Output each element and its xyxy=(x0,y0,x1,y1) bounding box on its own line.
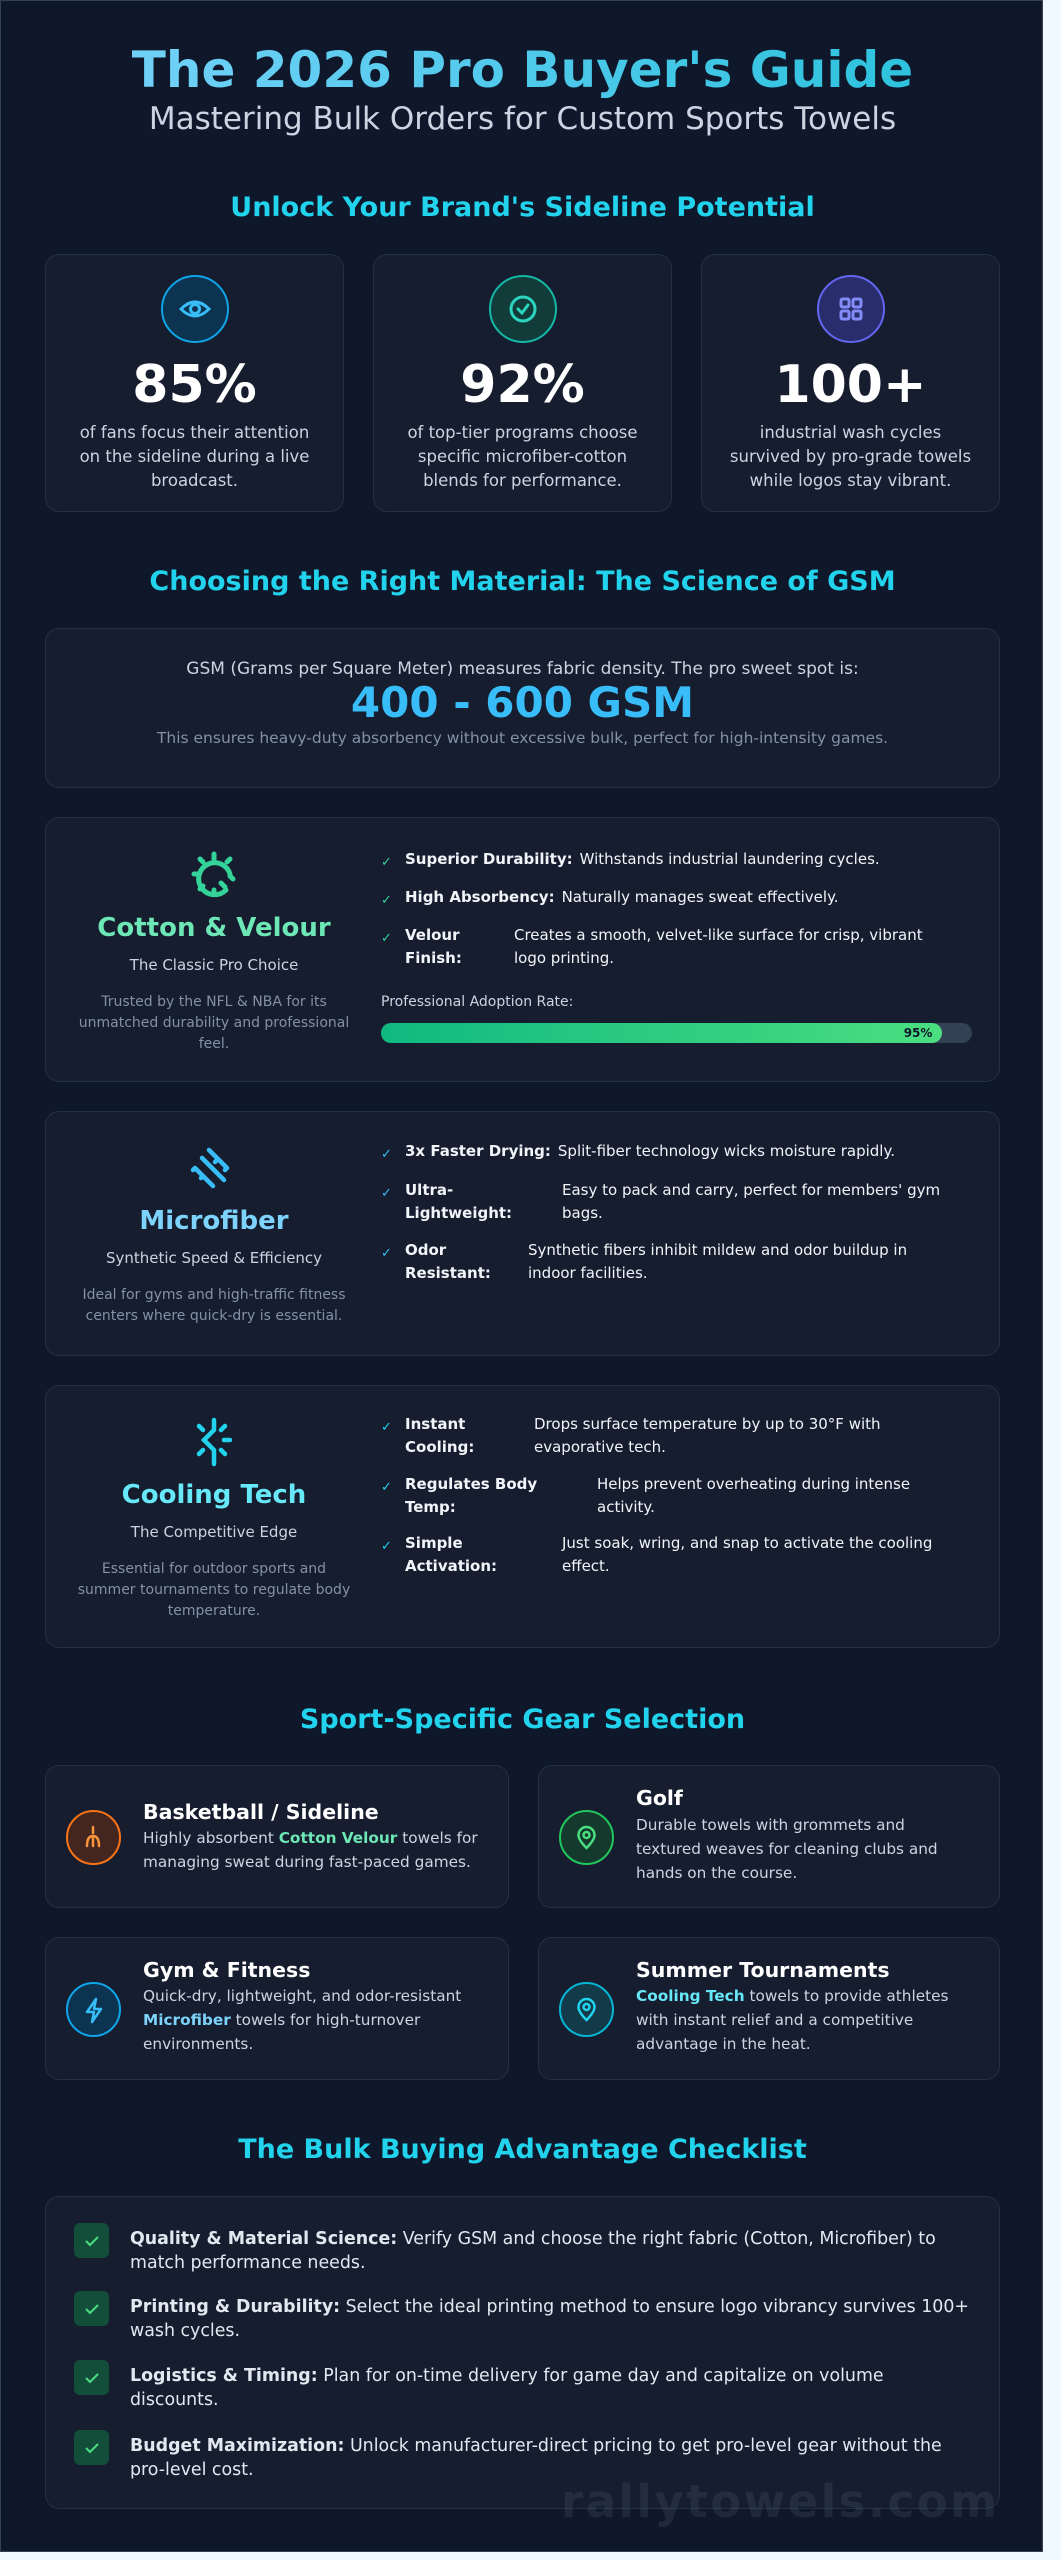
bullet: velour finish: Velour Finish: xyxy=(405,926,462,967)
bullet: faster drying: 3x Faster Drying: xyxy=(405,1142,551,1160)
bullet: instant cooling: Drops surface temperature by up to 30°F with evaporative tech. xyxy=(534,1415,881,1456)
bullet: faster drying: Split-fiber technology wicks moisture rapidly. xyxy=(558,1142,895,1160)
heading: checklist: The Bulk Buying Advantage Checklist xyxy=(238,2134,807,2165)
adoption label: Professional Adoption Rate: xyxy=(381,994,573,1010)
panel: cooling tech: Essential for outdoor sports and summer tournaments to regulate body temperature. xyxy=(78,1561,350,1619)
bullet: ultra-lightweight: ✓ xyxy=(381,1186,392,1201)
panel: cooling tech: The Competitive Edge xyxy=(131,1523,297,1541)
card: basketball: Highly absorbent Cotton Velour towels for managing sweat during fast-paced games. xyxy=(143,1829,478,1871)
item: budget: Budget Maximization: Unlock manufacturer-direct pricing to get pro-level gear without the pro-level cost. xyxy=(130,2436,942,2480)
GSM panel xyxy=(45,628,1000,788)
bullet: regulates temp: Regulates Body Temp: xyxy=(405,1475,537,1516)
bullet: ultra-lightweight: Ultra-Lightweight: xyxy=(405,1181,512,1222)
stat card: 92%: of top-tier programs choose specific microfiber-cotton blends for performance. xyxy=(407,423,638,490)
bullet: simple activation: Simple Activation: xyxy=(405,1534,497,1575)
bullet: regulates temp: ✓ xyxy=(381,1480,392,1495)
heading: sideline potential: Unlock Your Brand's Sideline Potential xyxy=(230,192,815,223)
card: gym: Quick-dry, lightweight, and odor-resistant Microfiber towels for high-turnover environments. xyxy=(143,1987,461,2053)
stat card: 100+: 100+ xyxy=(774,355,927,415)
bullet: simple activation xyxy=(381,1534,932,1575)
bullet: velour finish: ✓ xyxy=(381,931,392,946)
bullet: ultra-lightweight xyxy=(381,1181,940,1222)
bar chart: adoption 95% xyxy=(381,1023,972,1043)
panel: cooling tech: Cooling Tech xyxy=(122,1480,306,1510)
bullet: instant cooling xyxy=(381,1415,881,1456)
bullet: absorbency xyxy=(381,888,839,908)
panel: microfiber: Synthetic Speed & Efficiency xyxy=(106,1249,322,1267)
icon: basketball xyxy=(66,1810,121,1865)
panel: cotton & velour: The Classic Pro Choice xyxy=(130,956,298,974)
panel: microfiber xyxy=(45,1111,1000,1356)
icon: cooling xyxy=(196,1418,232,1466)
bullet: simple activation: Just soak, wring, and snap to activate the cooling effect. xyxy=(562,1534,932,1575)
icon: microfiber xyxy=(190,1148,230,1188)
panel: cotton & velour: Cotton & Velour xyxy=(97,913,331,943)
stat card: 85% xyxy=(45,254,344,512)
bullet: odor resistant: ✓ xyxy=(381,1246,392,1261)
item: quality: Quality & Material Science: Verify GSM and choose the right fabric (Cotton, Microfiber) to match performance needs. xyxy=(130,2229,936,2273)
bullet: regulates temp: Helps prevent overheating during intense activity. xyxy=(597,1475,910,1516)
panel: cotton & velour xyxy=(45,817,1000,1082)
panel: cooling tech xyxy=(45,1385,1000,1648)
card: basketball: Basketball / Sideline xyxy=(143,1800,379,1824)
bullet: velour finish: Creates a smooth, velvet-like surface for crisp, vibrant logo printing. xyxy=(514,926,923,967)
item: logistics: Logistics & Timing: Plan for on-time delivery for game day and capitalize on volume discounts. xyxy=(130,2366,884,2410)
bullet: regulates temp xyxy=(381,1475,910,1516)
bullet: odor resistant: Synthetic fibers inhibit mildew and odor buildup in indoor facilities. xyxy=(528,1241,907,1282)
stat card: 92%: 92% xyxy=(460,355,585,415)
panel: cotton & velour: Trusted by the NFL & NBA for its unmatched durability and professional feel. xyxy=(79,994,349,1052)
GSM panel: 400 - 600 GSM xyxy=(351,678,694,727)
bullet: instant cooling: ✓ xyxy=(381,1420,392,1435)
bullet: absorbency: Naturally manages sweat effectively. xyxy=(562,888,839,906)
card: golf xyxy=(538,1765,1000,1908)
subtitle: Mastering Bulk Orders for Custom Sports Towels xyxy=(149,101,896,137)
card: summer xyxy=(538,1937,1000,2080)
GSM panel: GSM (Grams per Square Meter) measures fabric density. The pro sweet spot is: xyxy=(186,659,859,679)
bullet: odor resistant: Odor Resistant: xyxy=(405,1241,491,1282)
bullet: durability: Withstands industrial laundering cycles. xyxy=(580,850,880,868)
icon: cotton xyxy=(192,852,236,898)
stat card: 100+ xyxy=(701,254,1000,512)
item: printing: Printing & Durability: Select the ideal printing method to ensure logo vibrancy survives 100+ wash cycles. xyxy=(130,2297,969,2341)
bullet: faster drying: ✓ xyxy=(381,1147,392,1162)
stat card: 85%: 85% xyxy=(132,355,257,415)
bullet: faster drying xyxy=(381,1142,895,1162)
card: gym xyxy=(45,1937,509,2080)
panel: checklist xyxy=(45,2196,1000,2509)
card: summer: Summer Tournaments xyxy=(636,1958,890,1982)
heading: sport-specific: Sport-Specific Gear Selection xyxy=(300,1704,745,1735)
icon: golf pin xyxy=(559,1810,614,1865)
icon: grid xyxy=(817,275,885,343)
bullet: simple activation: ✓ xyxy=(381,1539,392,1554)
bullet: instant cooling: Instant Cooling: xyxy=(405,1415,474,1456)
bullet: absorbency: High Absorbency: xyxy=(405,888,555,906)
stat card: 92% xyxy=(373,254,672,512)
card: gym: Gym & Fitness xyxy=(143,1958,310,1982)
icon: check circle xyxy=(489,275,557,343)
bullet: durability: Superior Durability: xyxy=(405,850,573,868)
stat card: 100+: industrial wash cycles survived by pro-grade towels while logos stay vibrant. xyxy=(730,423,971,490)
bullet: absorbency: ✓ xyxy=(381,893,392,908)
card: golf: Durable towels with grommets and textured weaves for cleaning clubs and hands on the course. xyxy=(636,1816,938,1882)
icon: lightning xyxy=(66,1982,121,2037)
card: golf: Golf xyxy=(636,1786,683,1810)
bullet: durability: ✓ xyxy=(381,855,392,870)
icon: eye xyxy=(161,275,229,343)
panel: microfiber: Ideal for gyms and high-traffic fitness centers where quick-dry is essential. xyxy=(82,1287,346,1324)
bullet: ultra-lightweight: Easy to pack and carry, perfect for members' gym bags. xyxy=(562,1181,940,1222)
bullet: durability xyxy=(381,850,880,870)
watermark: rallytowels.com xyxy=(561,2475,1000,2528)
bar chart: adoption 95%: 95% xyxy=(904,1026,932,1040)
title: The 2026 Pro Buyer's Guide xyxy=(132,41,913,99)
GSM panel: This ensures heavy-duty absorbency without excessive bulk, perfect for high-intensity games. xyxy=(157,729,888,747)
panel: microfiber: Microfiber xyxy=(139,1206,289,1236)
card: basketball xyxy=(45,1765,509,1908)
stat card: 85%: of fans focus their attention on the sideline during a live broadcast. xyxy=(80,423,309,490)
heading: GSM: Choosing the Right Material: The Science of GSM xyxy=(149,566,896,597)
card: summer: Cooling Tech towels to provide athletes with instant relief and a competitive advantage in the heat. xyxy=(636,1987,948,2053)
icon: pin xyxy=(559,1982,614,2037)
